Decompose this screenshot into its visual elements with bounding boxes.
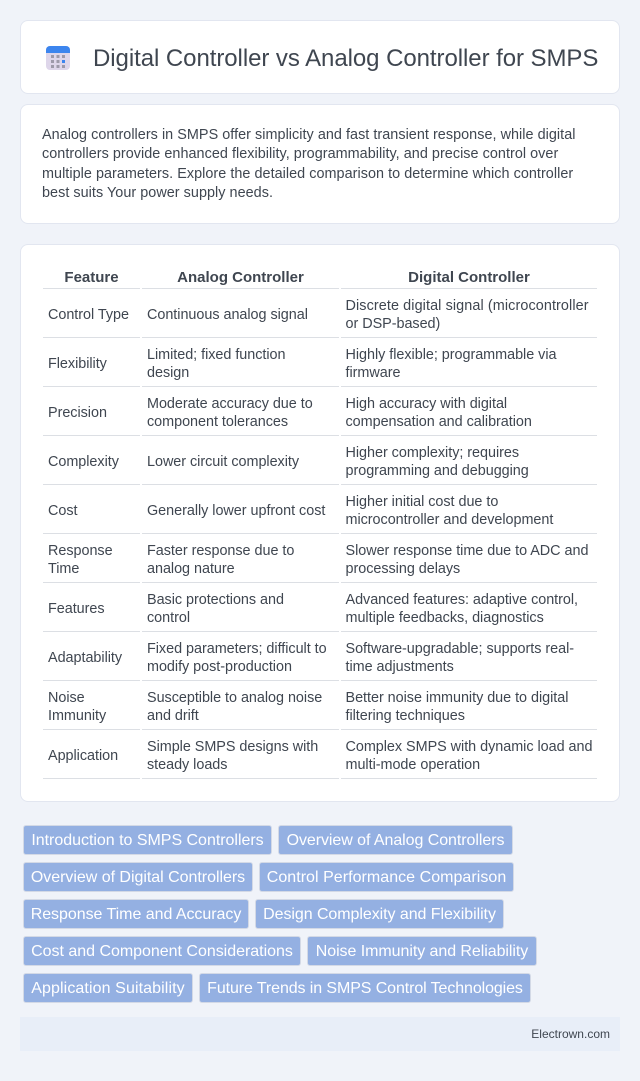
tag: Control Performance Comparison [267,869,506,886]
row: precision: Moderate accuracy due to [147,396,313,412]
table header: Analog Controller [177,269,304,286]
row: response time: Slower response time due to ADC and [346,543,588,559]
intro text: best suits Your power supply needs. [42,185,273,201]
footer [20,1017,620,1051]
row: noise immunity: Immunity [48,708,106,724]
row: control type: or DSP-based) [346,316,440,332]
tag [278,825,513,855]
row: complexity: Complexity [48,454,119,470]
intro text: multiple parameters. Explore the detailed comparison to determine which controller [42,166,573,182]
tag: Cost and Component Considerations [31,943,293,960]
comparison table panel [20,244,620,802]
row: adaptability: time adjustments [346,659,454,675]
row: features: Basic protections and [147,592,284,608]
row: application: Application [48,748,118,764]
row: adaptability: modify post-production [147,659,292,675]
row: complexity: Higher complexity; requires [346,445,519,461]
table header [64,269,530,286]
row: noise immunity: Better noise immunity due to digital [346,690,568,706]
row: noise immunity: and drift [147,708,199,724]
row: application [48,739,592,773]
row: adaptability [48,641,574,675]
row: flexibility: Flexibility [48,356,107,372]
tag [199,973,531,1003]
row: response time: analog nature [147,561,235,577]
row: adaptability: Fixed parameters; difficult to [147,641,327,657]
row: cost: microcontroller and development [346,512,553,528]
row: noise immunity: filtering techniques [346,708,465,724]
row: flexibility: firmware [346,365,400,381]
row: precision [48,396,532,430]
row: response time: Time [48,561,79,577]
row: flexibility: design [147,365,189,381]
tag: Design Complexity and Flexibility [263,906,496,923]
row: response time [48,543,588,577]
row: control type: Discrete digital signal (microcontroller [346,298,589,314]
tag [23,936,301,966]
row: response time: processing delays [346,561,460,577]
row: adaptability: Adaptability [48,650,122,666]
tag [23,825,272,855]
row: noise immunity: Susceptible to analog noise [147,690,322,706]
row: precision: component tolerances [147,414,288,430]
tag [23,862,253,892]
row: features: multiple feedbacks, diagnostics [346,610,544,626]
row: features: Features [48,601,105,617]
tag: Overview of Analog Controllers [287,832,504,849]
row: flexibility: Highly flexible; programmable via [346,347,556,363]
footer credit: Electrown.com [531,1027,610,1041]
tag [259,862,514,892]
tag [255,899,504,929]
row: response time: Faster response due to [147,543,294,559]
intro text [42,126,575,201]
row: complexity [48,445,529,479]
row: precision: Precision [48,405,107,421]
row: application: multi-mode operation [346,757,480,773]
row: features: control [147,610,190,626]
tag: Response Time and Accuracy [31,906,241,923]
row: cost: Higher initial cost due to [346,494,498,510]
intro text: controllers provide enhanced flexibility, programmability, and precise control over [42,146,558,162]
row: response time: Response [48,543,113,559]
row: precision: compensation and calibration [346,414,532,430]
row: flexibility [48,347,556,381]
row: noise immunity [48,690,568,724]
row: precision: High accuracy with digital [346,396,507,412]
row: control type: Continuous analog signal [147,307,308,323]
title: Digital Controller vs Analog Controller for SMPS [93,45,598,72]
row: cost: Generally lower upfront cost [147,503,325,519]
row: cost: Cost [48,503,77,519]
row: flexibility: Limited; fixed function [147,347,286,363]
topic tags [23,825,537,1003]
row: application: steady loads [147,757,227,773]
intro panel [20,104,620,224]
row: control type: Control Type [48,307,129,323]
row: adaptability: Software-upgradable; supports real- [346,641,574,657]
row: features: Advanced features: adaptive control, [346,592,578,608]
intro text: Analog controllers in SMPS offer simplicity and fast transient response, while digital [42,126,575,142]
tag: Overview of Digital Controllers [31,869,245,886]
tag [23,899,249,929]
row: application: Simple SMPS designs with [147,739,318,755]
row: complexity: Lower circuit complexity [147,454,299,470]
table header: Feature [64,269,119,286]
tag: Future Trends in SMPS Control Technologies [207,980,523,997]
tag [307,936,537,966]
row: complexity: programming and debugging [346,463,529,479]
header card [20,20,620,94]
tag: Application Suitability [31,980,185,997]
row: noise immunity: Noise [48,690,85,706]
tag: Introduction to SMPS Controllers [31,832,264,849]
row: cost [48,494,554,528]
tag: Noise Immunity and Reliability [316,943,528,960]
icon: calendar grid [46,46,70,70]
tag [23,973,193,1003]
row: features [48,592,578,626]
row: control type [48,298,589,332]
row: application: Complex SMPS with dynamic load and [346,739,592,755]
table header: Digital Controller [408,269,530,286]
